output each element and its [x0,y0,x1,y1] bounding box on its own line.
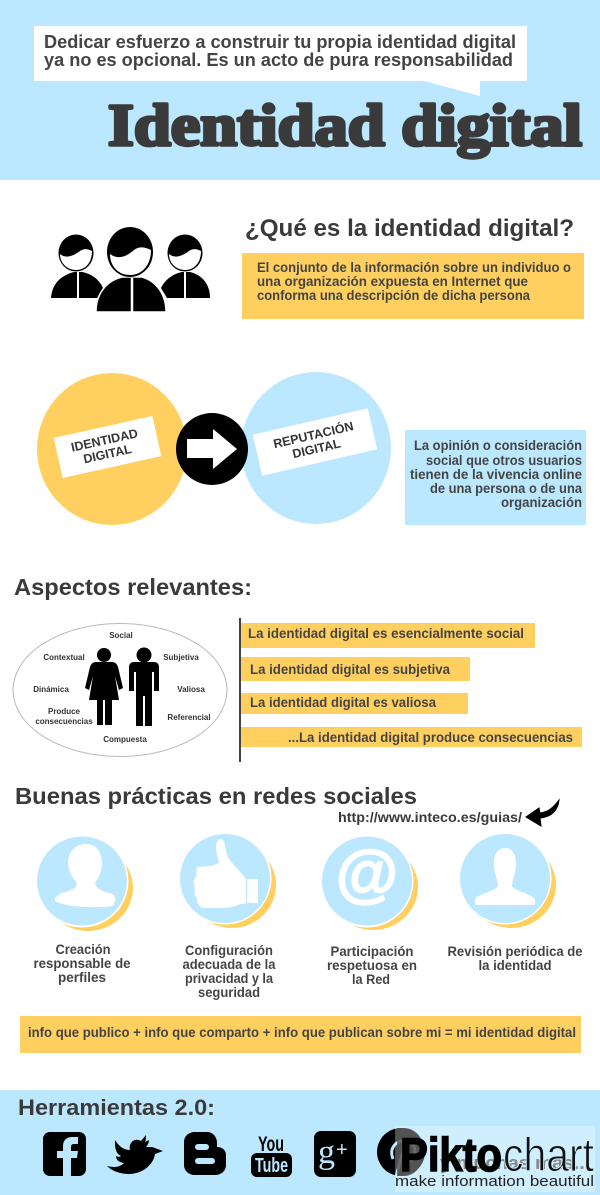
panel: definition: El conjunto de la información sobre un individuo o [257,259,571,275]
panel: reputation definition: organización [501,494,582,510]
heading: herramientas: Herramientas 2.0: [18,1095,215,1120]
icon: arrow [176,413,248,485]
text: practice 1: perfiles [58,969,106,985]
text: practice 2: Configuración [185,942,273,958]
panel: definition: una organización expuesta en Internet que [257,273,528,289]
text: practice 2 [182,942,276,1000]
text: practice 2: privacidad y la [185,970,273,986]
icon: youtube [251,1133,292,1177]
panel: header [0,0,600,180]
panel: reputation definition: social que otros usuarios [426,452,582,468]
circle: reputacion digital: DIGITAL [291,436,342,461]
text: practice 3: Participación [330,943,414,959]
text: practice 3 [327,943,417,987]
link: inteco url: http://www.inteco.es/guias/ [338,809,522,825]
title: Identidad digital [108,92,582,158]
panel: reputation definition [405,430,586,525]
watermark: piktochart: Pikto [400,1128,502,1181]
panel: formula: info que publico + info que comparto + info que publican sobre mi = mi identidad digital [28,1024,576,1040]
panel: reputation definition: de una persona o de una [430,480,582,496]
panel: aspect statements: ...La identidad digital produce consecuencias [288,729,573,745]
icon: at sign circle: @ [336,837,398,909]
panel: footer [0,1090,600,1195]
diagram: aspects ellipse [13,624,227,756]
circle: reputacion digital [241,372,391,524]
icon: twitter [107,1135,163,1174]
icon: thumbs up circle [178,832,276,928]
icon: profile circle [36,834,133,931]
panel: aspect statements: La identidad digital es subjetiva [250,661,450,677]
panel: reputation definition: tienen de la vivencia online [410,466,582,482]
text: practice 1: responsable de [34,955,131,971]
panel: formula [20,1016,581,1053]
watermark: piktochart: make information beautiful [395,1173,594,1190]
diagram: aspects ellipse: consecuencias [35,717,93,726]
icon: woman [85,648,123,725]
diagram: aspects ellipse: Produce [48,707,81,716]
heading: aspectos relevantes: Aspectos relevantes: [14,574,252,600]
text: practice 2: adecuada de la [182,956,276,972]
icon: facebook [43,1132,86,1176]
panel: definition [242,253,584,319]
icon: at sign circle [320,834,418,930]
text: y muchas mas: y muchas más... [440,1153,590,1173]
text: practice 4: la identidad [478,957,552,973]
text: practice 4 [448,943,583,973]
callout: speech bubble: ya no es opcional. Es un acto de pura responsabilidad [44,49,513,70]
icon: group of people [51,227,210,312]
diagram: aspects ellipse: Dinámica [33,685,69,694]
panel: reputation definition: La opinión o consideración [414,437,582,453]
circle: identidad digital [37,373,187,525]
heading: what is digital identity: ¿Qué es la identidad digital? [245,215,574,242]
diagram: aspects ellipse: Valiosa [177,685,205,694]
text: practice 2: seguridad [198,984,260,1000]
icon: google plus: g [318,1134,335,1171]
circle: reputacion digital: REPUTACIÓN [272,418,355,451]
text: practice 1: Creación [56,941,110,957]
heading: buenas practicas: Buenas prácticas en redes sociales [15,783,417,809]
callout: speech bubble: Dedicar esfuerzo a construir tu propia identidad digital [44,31,516,52]
watermark: piktochart [395,1126,595,1192]
circle: identidad digital: IDENTIDAD [70,426,139,455]
callout: speech bubble [34,26,527,96]
panel: aspect statements: La identidad digital es esencialmente social [248,625,524,641]
panel: definition: conforma una descripción de dicha persona [257,287,530,303]
icon: blogger [184,1132,226,1175]
diagram: aspects ellipse: Referencial [167,713,211,722]
panel: aspect statements [239,618,582,762]
text: practice 4: Revisión periódica de [448,943,583,959]
icon: youtube: You [258,1133,284,1156]
icon: pinterest [377,1128,425,1177]
icon: silhouette circle [458,832,556,928]
icon: curved arrow [526,800,559,826]
diagram: aspects ellipse: Subjetiva [163,653,199,662]
diagram: aspects ellipse: Compuesta [103,735,147,744]
circle: identidad digital: DIGITAL [82,442,133,466]
text: practice 3: la Red [352,971,390,987]
icon: google plus [314,1131,356,1177]
icon: youtube: Tube [255,1155,288,1177]
icon: man [129,648,159,726]
diagram: aspects ellipse: Contextual [43,653,85,662]
text: practice 1 [34,941,131,985]
panel: aspect statements: La identidad digital es valiosa [250,694,436,710]
text: practice 3: respetuosa en [327,957,417,973]
diagram: aspects ellipse: Social [109,631,133,640]
icon: google plus: + [336,1139,348,1161]
